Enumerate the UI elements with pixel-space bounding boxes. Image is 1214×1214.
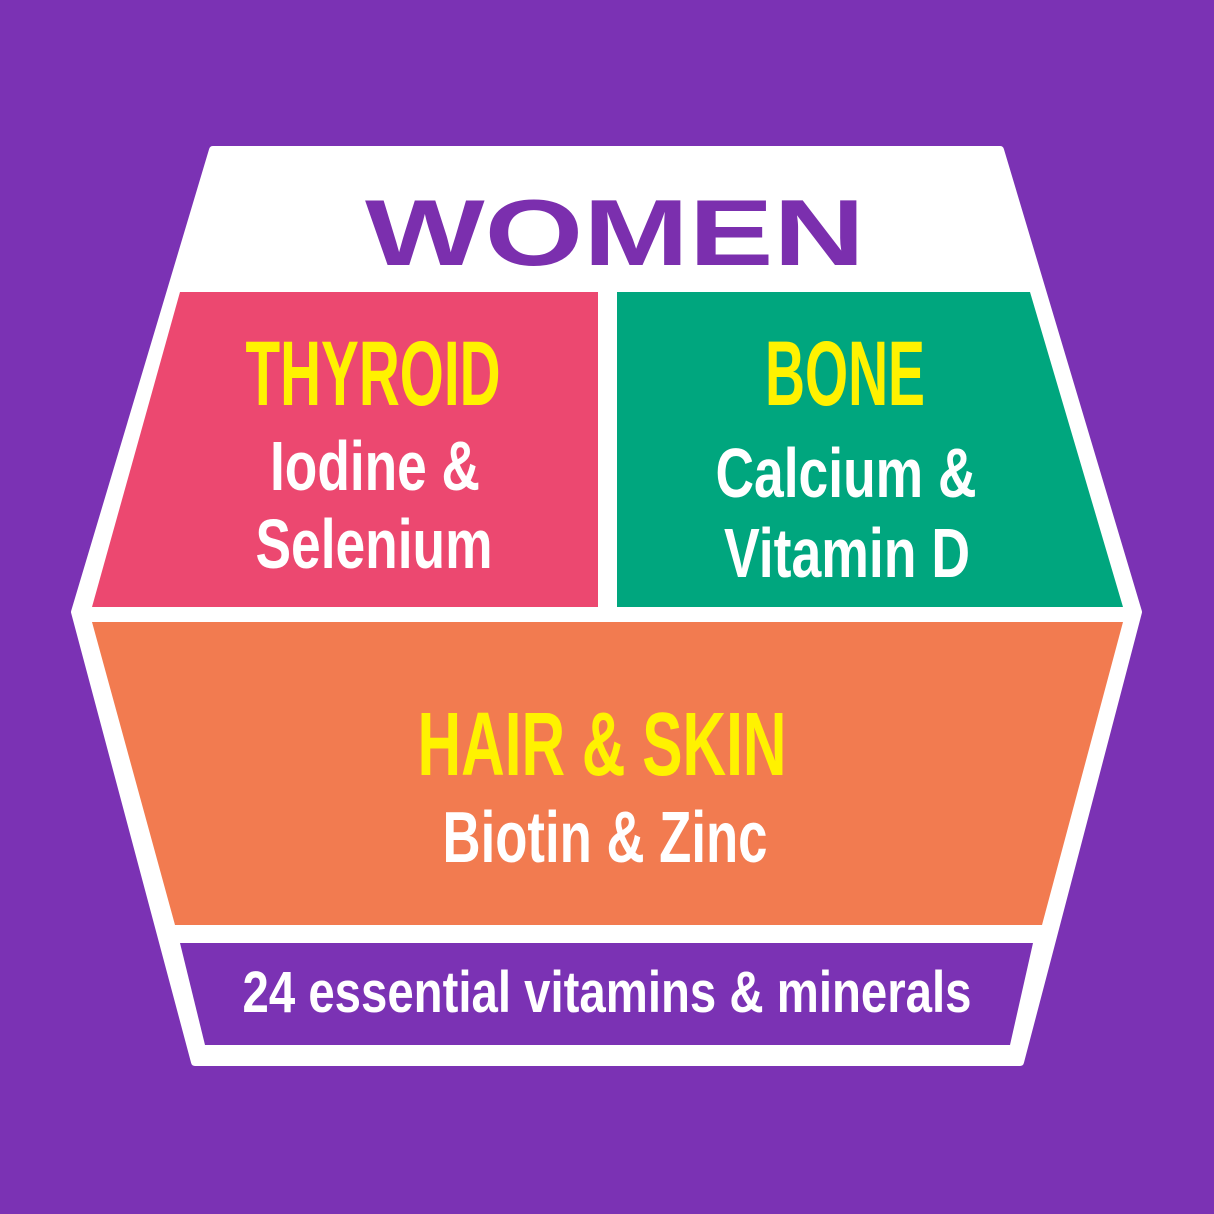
footer band: 24 essential vitamins & minerals <box>242 960 972 1025</box>
panel: hair & skin: Biotin & Zinc <box>442 798 768 878</box>
panel: thyroid: THYROID <box>246 323 500 425</box>
title: WOMEN <box>365 180 865 285</box>
panel: thyroid <box>92 292 598 607</box>
footer band <box>180 943 1033 1045</box>
panel: thyroid: Iodine & <box>270 427 480 505</box>
panel: thyroid: Selenium <box>256 505 492 583</box>
panel: hair & skin: HAIR & SKIN <box>418 695 786 795</box>
panel: hair & skin <box>92 622 1123 925</box>
panel: bone <box>617 292 1123 607</box>
panel: bone: Vitamin D <box>724 514 970 592</box>
panel: bone: Calcium & <box>716 434 976 512</box>
panel: bone: BONE <box>765 323 925 425</box>
hexagon frame <box>75 150 1138 1062</box>
